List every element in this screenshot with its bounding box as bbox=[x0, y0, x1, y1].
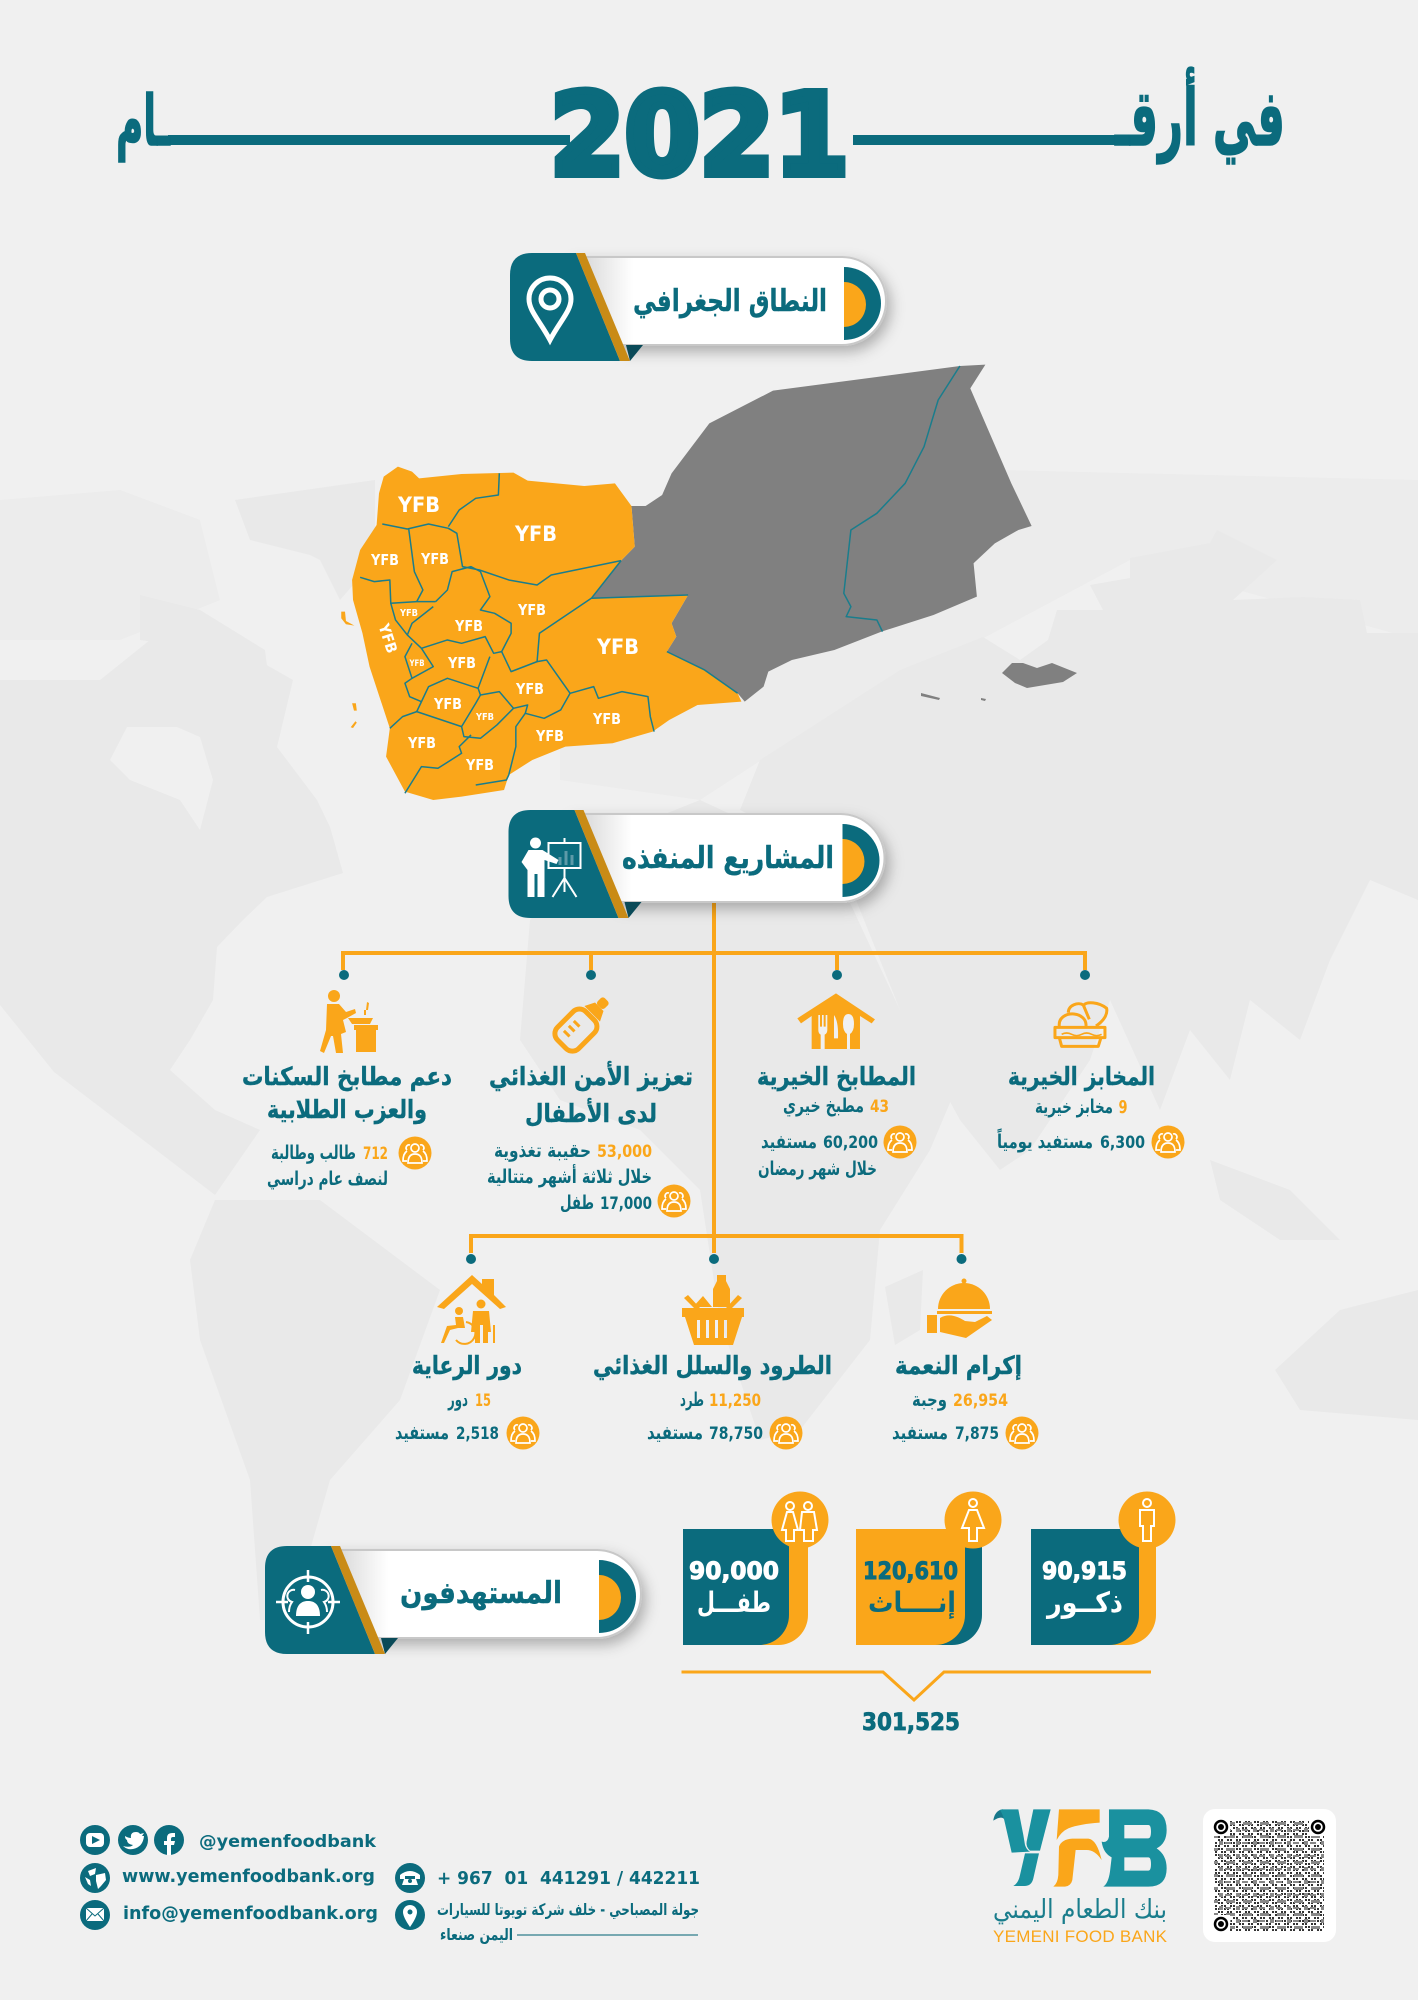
project: care homes bbox=[395, 1275, 540, 1450]
project: food baskets: 11,250 bbox=[709, 1391, 761, 1411]
logo: YFB bbox=[993, 1809, 1168, 1946]
project: child food security: تعزيز الأمن الغذائي bbox=[489, 1061, 693, 1092]
project: food baskets: مستفيد bbox=[647, 1422, 703, 1444]
YFB map labels: YFB bbox=[465, 756, 494, 774]
project: child food security: حقيبة تغذوية bbox=[494, 1140, 591, 1162]
YFB map labels: YFB bbox=[397, 493, 440, 517]
project: charity bakeries: مستفيد يومياً bbox=[997, 1128, 1093, 1153]
world map backdrop bbox=[0, 470, 1418, 1620]
section header: beneficiaries: المستهدفون bbox=[400, 1576, 562, 1611]
stat card: children: طفـــل bbox=[697, 1586, 771, 1619]
QR code bbox=[1203, 1809, 1336, 1942]
map of Yemen bbox=[341, 365, 1077, 800]
stat card: females bbox=[856, 1492, 1002, 1645]
project: charity kitchens bbox=[757, 993, 916, 1180]
social handle: @yemenfoodbank bbox=[199, 1832, 377, 1852]
YFB map labels: YFB bbox=[409, 659, 425, 669]
icon: house with cutlery bbox=[797, 993, 875, 1049]
project: care homes: دور bbox=[447, 1389, 468, 1411]
logo: YFB: بنك الطعام اليمني bbox=[993, 1895, 1167, 1925]
icon: baby bottle bbox=[551, 989, 617, 1055]
project: charity bakeries: المخابز الخيرية bbox=[1008, 1062, 1155, 1092]
YFB map labels: YFB bbox=[399, 608, 418, 619]
total bracket bbox=[682, 1672, 1151, 1700]
socotra and small islands bbox=[921, 663, 1077, 701]
YFB map labels: YFB bbox=[514, 522, 557, 546]
stat card: males: 90,915 bbox=[1042, 1557, 1127, 1585]
project: student kitchens bbox=[242, 990, 452, 1190]
project: student kitchens: دعم مطابخ السكنات bbox=[242, 1062, 452, 1092]
section header: implemented projects bbox=[508, 810, 884, 918]
project: care homes: دور الرعاية bbox=[412, 1351, 522, 1381]
project: charity kitchens: مستفيد bbox=[761, 1131, 817, 1153]
icon: address pin bbox=[395, 1900, 425, 1930]
title: ـام bbox=[116, 80, 171, 163]
project: child food security: 17,000 bbox=[600, 1194, 652, 1214]
icon: globe bbox=[80, 1863, 110, 1893]
project: charity bakeries bbox=[997, 1003, 1184, 1158]
icon: woman bbox=[962, 1499, 984, 1541]
icon: bread basket bbox=[1055, 1003, 1107, 1046]
title bbox=[116, 67, 1285, 201]
project: food grace: وجبة bbox=[912, 1389, 947, 1411]
YFB map labels: YFB bbox=[596, 635, 639, 659]
project: child food security: طفل bbox=[560, 1192, 594, 1214]
project: food baskets bbox=[593, 1275, 832, 1450]
project: food grace: إكرام النعمة bbox=[895, 1351, 1022, 1381]
icon: location pin bbox=[529, 278, 571, 340]
YFB map labels: YFB bbox=[420, 550, 449, 568]
project: care homes: 15 bbox=[475, 1391, 491, 1411]
icon: cloche in hand bbox=[927, 1278, 992, 1338]
icon: youtube bbox=[80, 1825, 110, 1855]
project: charity kitchens: 43 bbox=[870, 1097, 889, 1117]
stat card: males: ذكــور bbox=[1045, 1586, 1123, 1619]
section header: implemented projects: المشاريع المنفذه bbox=[622, 841, 834, 876]
YFB map labels: YFB bbox=[475, 712, 494, 723]
project: child food security: 53,000 bbox=[597, 1142, 652, 1162]
project: child food security bbox=[487, 989, 693, 1218]
phone number: + 967 01 441291 / 442211 bbox=[437, 1868, 700, 1889]
red sea islands bbox=[341, 612, 357, 728]
project: care homes: 2,518 bbox=[456, 1424, 499, 1444]
icon: grocery basket bbox=[682, 1275, 744, 1345]
stat card: children: 90,000 bbox=[689, 1557, 779, 1585]
grey governorates bbox=[591, 365, 1032, 702]
project: charity kitchens: المطابخ الخيرية bbox=[757, 1062, 916, 1092]
footer: social and contact bbox=[80, 1825, 700, 1944]
stat card: females: 120,610 bbox=[863, 1557, 958, 1585]
title: 2021 bbox=[550, 71, 849, 201]
stat card: females: إنــــاث bbox=[868, 1586, 956, 1620]
YFB map labels: YFB bbox=[592, 710, 621, 728]
project: charity kitchens: مطبخ خيري bbox=[783, 1095, 864, 1118]
orange governorates bbox=[352, 467, 741, 800]
YFB map labels: YFB bbox=[407, 734, 436, 752]
address: جولة المصباحي - خلف شركة تويوتا للسيارات bbox=[437, 1900, 699, 1920]
project: food grace: 26,954 bbox=[953, 1391, 1008, 1411]
icon: twitter bbox=[118, 1825, 148, 1855]
stat card: children bbox=[683, 1492, 828, 1645]
YFB map labels: YFB bbox=[454, 617, 483, 635]
project: food grace: مستفيد bbox=[892, 1422, 948, 1444]
project: food grace bbox=[892, 1278, 1038, 1450]
project: student kitchens: 712 bbox=[363, 1144, 388, 1164]
website: www.yemenfoodbank.org bbox=[122, 1866, 375, 1887]
project: student kitchens: طالب وطالبة bbox=[271, 1142, 356, 1164]
title: في أرقـ bbox=[1114, 67, 1285, 164]
project: charity kitchens: خلال شهر رمضان bbox=[758, 1158, 877, 1180]
project: food baskets: طرد bbox=[680, 1389, 704, 1411]
project: care homes: مستفيد bbox=[395, 1422, 449, 1444]
project: child food security: لدى الأطفال bbox=[525, 1098, 657, 1128]
governorate borders bbox=[360, 366, 960, 793]
section header: geographic scope bbox=[510, 253, 886, 361]
section header: geographic scope: النطاق الجغرافي bbox=[633, 284, 827, 319]
project: charity bakeries: 9 bbox=[1118, 1097, 1128, 1118]
footer: social and contact: اليمن صنعاء bbox=[440, 1925, 513, 1944]
total number: 301,525 bbox=[862, 1708, 960, 1736]
YFB map labels: YFB bbox=[515, 680, 544, 698]
logo: YFB: YEMENI FOOD BANK bbox=[993, 1927, 1168, 1946]
connector lines: projects tree bbox=[339, 901, 1090, 1264]
stat card: males bbox=[1031, 1492, 1176, 1645]
icon: target people bbox=[276, 1570, 340, 1634]
icon: phone bbox=[395, 1863, 425, 1893]
YFB map labels: YFB bbox=[447, 654, 476, 672]
project: food baskets: 78,750 bbox=[709, 1424, 763, 1444]
YFB map labels bbox=[370, 493, 639, 774]
icon: care home bbox=[437, 1275, 506, 1344]
icon: cook at pot bbox=[320, 990, 378, 1053]
project: student kitchens: والعزب الطلابية bbox=[267, 1095, 427, 1125]
project: food grace: 7,875 bbox=[955, 1424, 999, 1444]
project: charity kitchens: 60,200 bbox=[823, 1133, 878, 1153]
YFB map labels: YFB bbox=[374, 621, 401, 656]
YFB map labels: YFB bbox=[433, 695, 462, 713]
icon: two children bbox=[782, 1502, 817, 1541]
project: child food security: خلال ثلاثة أشهر متتالية bbox=[487, 1164, 652, 1188]
icon: mail bbox=[80, 1900, 110, 1930]
email: info@yemenfoodbank.org bbox=[123, 1903, 378, 1924]
section header: beneficiaries bbox=[265, 1546, 641, 1654]
icon: facebook bbox=[154, 1825, 184, 1855]
project: student kitchens: لنصف عام دراسي bbox=[267, 1168, 388, 1190]
YFB map labels: YFB bbox=[517, 601, 546, 619]
icon: man bbox=[1140, 1499, 1154, 1541]
project: charity bakeries: 6,300 bbox=[1100, 1133, 1145, 1153]
project: charity bakeries: مخابز خيرية bbox=[1035, 1096, 1113, 1118]
icon: presenter at board bbox=[522, 838, 580, 897]
project: food baskets: الطرود والسلل الغذائي bbox=[593, 1351, 832, 1381]
YFB map labels: YFB bbox=[370, 551, 399, 569]
YFB map labels: YFB bbox=[535, 727, 564, 745]
